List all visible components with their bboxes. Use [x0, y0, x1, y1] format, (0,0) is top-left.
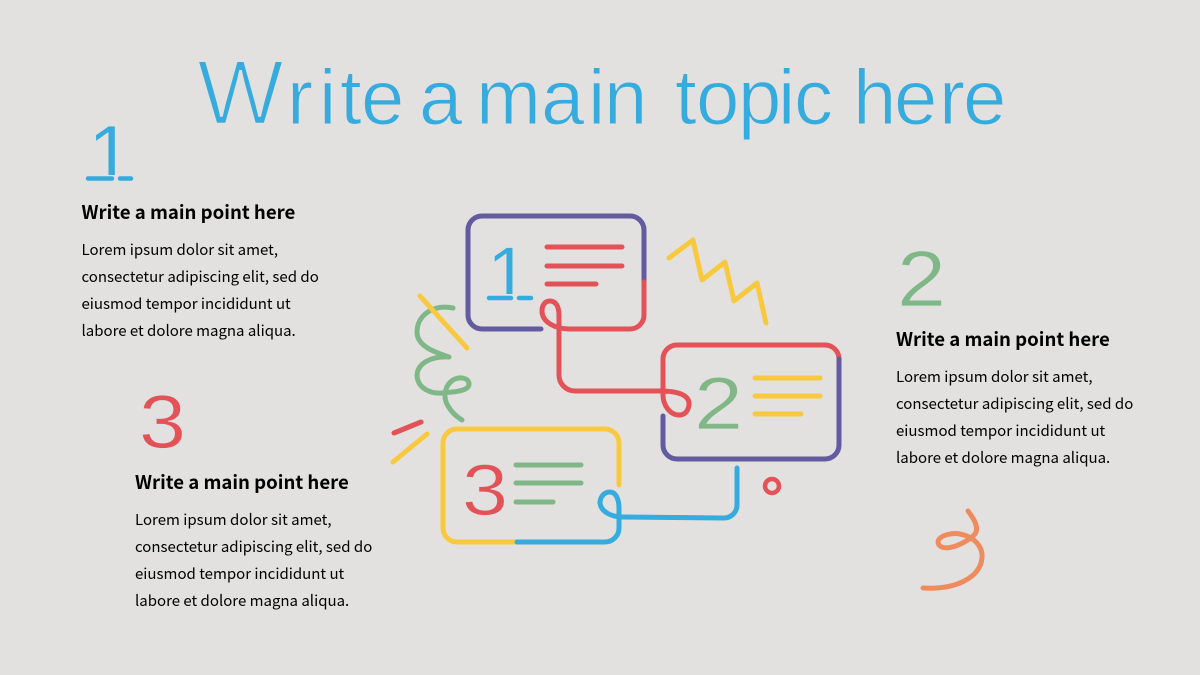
- text block: point 3: Lorem ipsum dolor sit amet,: [135, 509, 332, 530]
- text block: point 2: [896, 325, 1133, 468]
- card 3 number: 3: [462, 451, 508, 531]
- orange squiggle: [923, 511, 982, 588]
- text block: point 2: labore et dolore magna aliqua.: [896, 447, 1110, 468]
- numeral 3: 3: [139, 380, 186, 464]
- card 1 text lines: [547, 247, 622, 284]
- text block: point 1: labore et dolore magna aliqua.: [82, 320, 296, 341]
- text block: point 3: Write a main point here: [135, 468, 349, 495]
- numeral 1: 1: [88, 109, 132, 198]
- connector 1 to 2: [559, 315, 689, 415]
- numeral 1: [86, 126, 134, 181]
- text block: point 2: Lorem ipsum dolor sit amet,: [896, 366, 1093, 387]
- yellow dash: [393, 434, 427, 462]
- small ring: [765, 479, 779, 493]
- card 1: [468, 216, 644, 329]
- text block: point 1: [82, 198, 319, 341]
- card 3: [443, 429, 622, 542]
- card 2 text lines: [755, 378, 820, 414]
- text block: point 1: Lorem ipsum dolor sit amet,: [82, 239, 278, 260]
- text block: point 3: labore et dolore magna aliqua.: [135, 590, 349, 611]
- illustration: linked cards: [393, 216, 839, 542]
- red dash: [394, 422, 421, 433]
- text block: point 2: Write a main point here: [896, 325, 1110, 352]
- card 1 number: 1: [487, 232, 529, 317]
- text block: point 3: eiusmod tempor incididunt ut: [135, 563, 344, 584]
- green squiggle: [417, 307, 469, 420]
- numeral 2: 2: [897, 234, 946, 323]
- text block: point 3: consectetur adipiscing elit, sed do: [135, 536, 372, 557]
- card 2: [663, 345, 839, 459]
- title: Write a main topic here: [197, 42, 1006, 144]
- text block: point 3: [135, 468, 372, 611]
- card 1 number: [486, 248, 534, 300]
- zigzag: [669, 240, 766, 323]
- text block: point 2: consectetur adipiscing elit, sed do: [896, 393, 1133, 414]
- text block: point 2: eiusmod tempor incididunt ut: [896, 420, 1105, 441]
- text block: point 1: consectetur adipiscing elit, sed do: [82, 266, 319, 287]
- card 3 text lines: [516, 465, 581, 502]
- card 2 number: 2: [694, 362, 743, 445]
- text block: point 1: Write a main point here: [82, 198, 295, 225]
- yellow slash: [420, 296, 467, 348]
- text block: point 1: eiusmod tempor incididunt ut: [82, 293, 291, 314]
- connector 3 to 2: [622, 468, 737, 518]
